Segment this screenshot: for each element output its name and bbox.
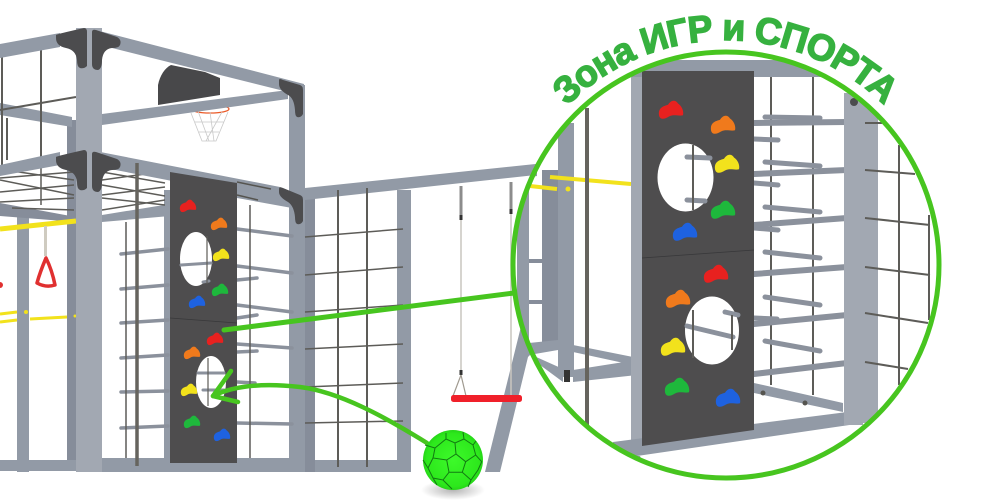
- far post: [397, 190, 411, 472]
- swing: [451, 182, 522, 402]
- magnified far frame: [517, 123, 631, 382]
- climbing wall panel: [170, 172, 237, 463]
- zoom circle outline: [513, 52, 939, 478]
- yellow bars: [0, 218, 92, 322]
- rope ladder left of wall: [121, 163, 168, 466]
- magnified top and bottom beams: [613, 60, 863, 472]
- magnified climbing holds: [659, 101, 740, 407]
- climbing holds on small wall: [180, 200, 230, 441]
- playground frame: main structure: [0, 28, 315, 472]
- upper cargo net: [0, 42, 165, 210]
- magnified hole two: [685, 296, 739, 364]
- wall holes: [180, 232, 226, 408]
- gymnastic ring: [0, 226, 55, 288]
- magnified rope verticals: [771, 77, 813, 395]
- swing bay frame with cargo net: [305, 163, 545, 472]
- soccer ball: [421, 430, 485, 500]
- basketball backboard and hoop: [158, 65, 229, 141]
- magnified far rungs: [754, 117, 820, 351]
- swing hangers: [461, 182, 511, 216]
- magnified hole one: [658, 144, 714, 212]
- main posts: [76, 28, 315, 472]
- magnified rope: [585, 108, 589, 425]
- bottom rail: [315, 460, 411, 472]
- seat harness: [453, 375, 466, 396]
- curved arrow from ball to wall hole: [213, 371, 427, 443]
- magnified yellow bars: [530, 177, 631, 192]
- magnified seam: [642, 250, 754, 258]
- rungs seen through holes: [181, 236, 224, 406]
- A-frame leg: [485, 290, 545, 472]
- rungs right of wall: [237, 182, 292, 458]
- callout line to zoom circle: [224, 293, 514, 330]
- metal corner plates: [56, 28, 303, 224]
- red seat: [451, 395, 522, 402]
- swing ropes: [461, 186, 511, 396]
- zoom circle background: [513, 52, 939, 478]
- seam: [170, 318, 237, 323]
- magnified wall detail: [495, 60, 930, 472]
- magnified side net: [865, 123, 930, 385]
- magnified right post: [844, 93, 878, 425]
- magnified near rungs: [754, 122, 847, 374]
- cargo net: [305, 188, 403, 467]
- rear posts and back beams: [0, 103, 305, 472]
- magnified wall panel: [642, 71, 754, 446]
- top and middle beams: [0, 28, 304, 205]
- title curved above the circle: Зона ИГР и СПОРТА: [554, 15, 894, 106]
- swing beam: [305, 163, 545, 200]
